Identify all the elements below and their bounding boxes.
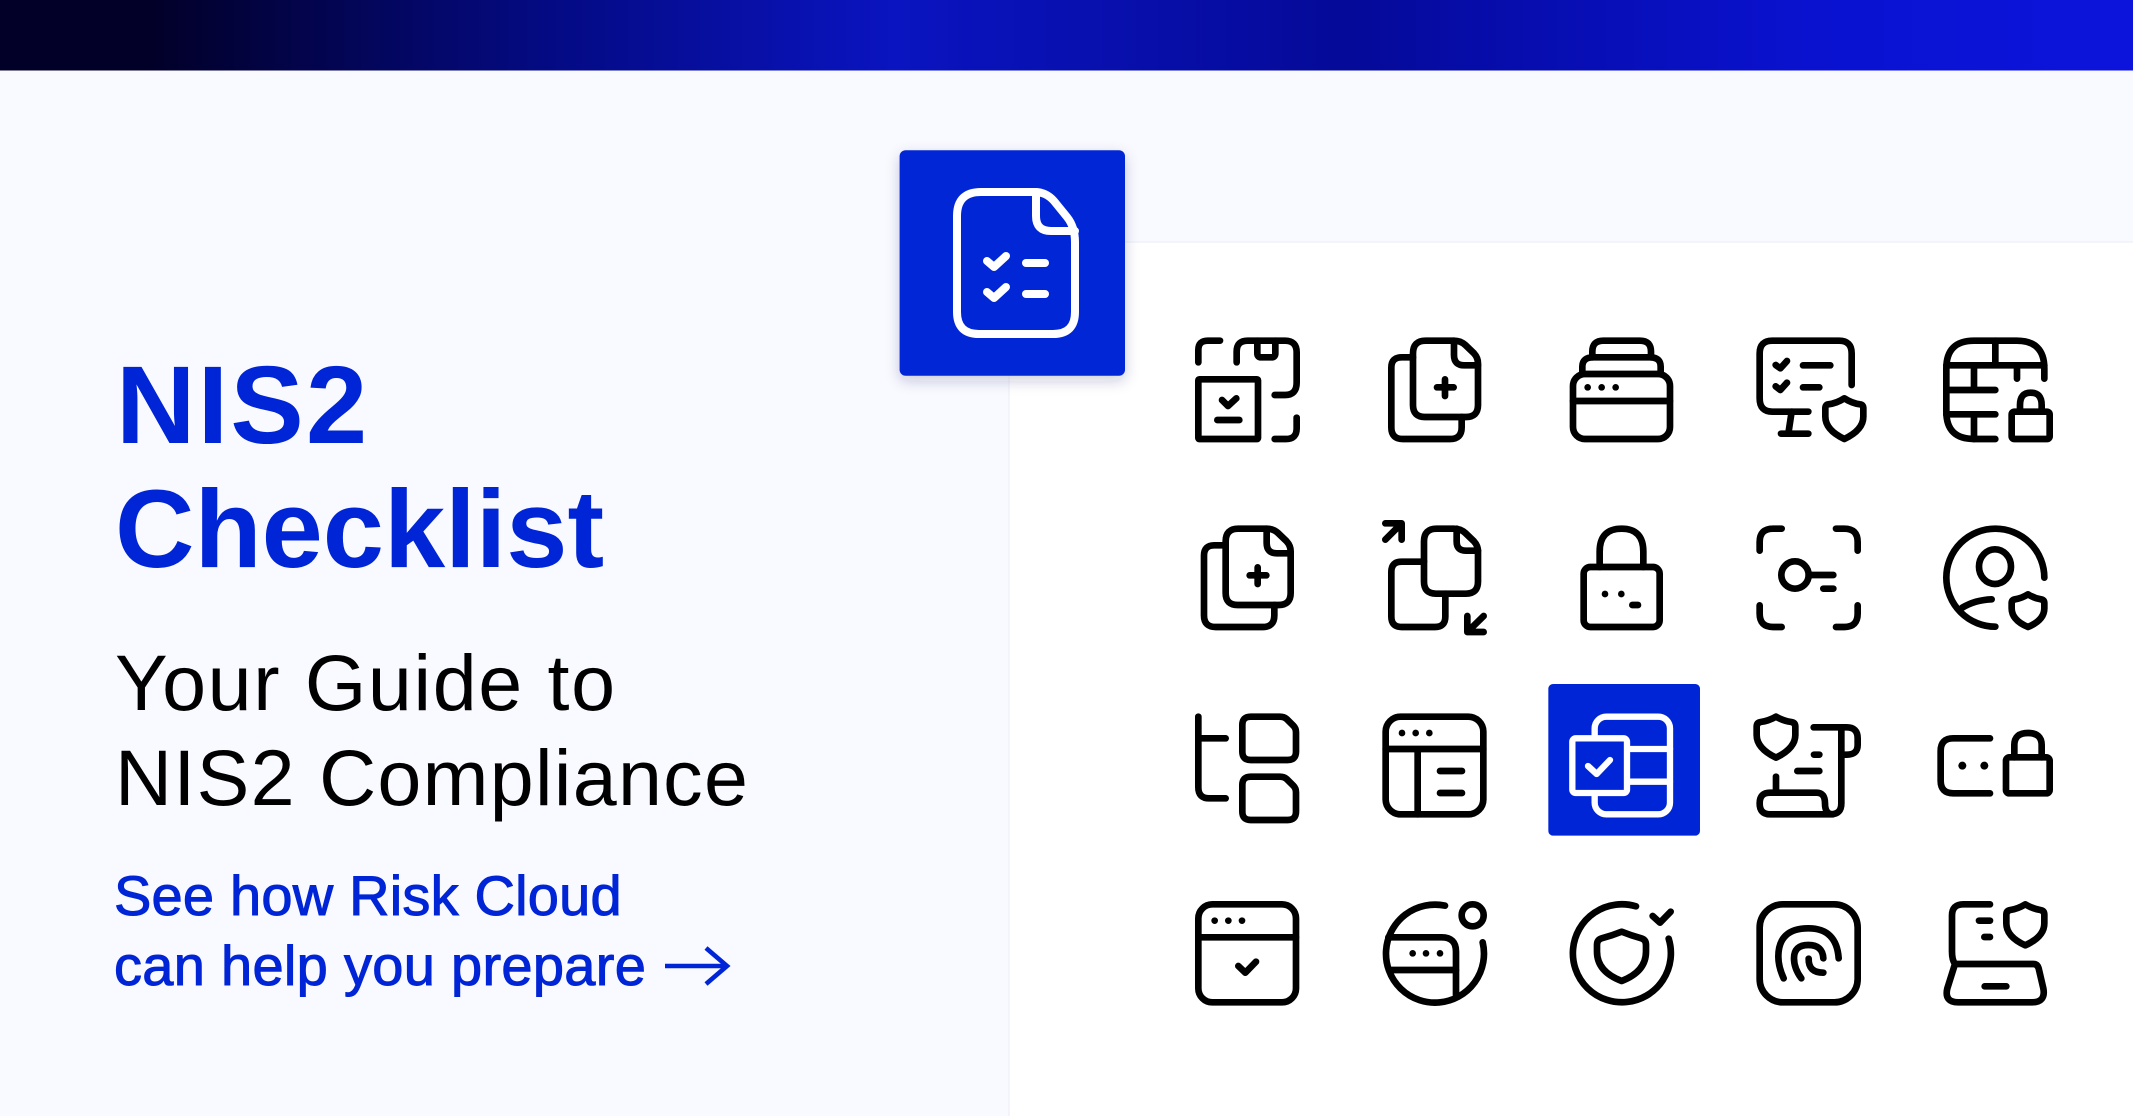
- top gradient bar: [0, 0, 2133, 70]
- icons, rows 1 and 2, columns 1 to 3: [1198, 341, 1670, 632]
- icons, rows 3 and 4, columns 1 to 3: [1198, 684, 1700, 1003]
- call to action text: can help you prepare: [114, 934, 646, 997]
- arrow: [665, 948, 727, 984]
- icons, rows 1 and 2, columns 4 and 5: [1760, 341, 2050, 627]
- icon: package scan: [1198, 341, 1297, 439]
- icons, rows 3 and 4, columns 4 and 5: [1757, 717, 2050, 1002]
- icon: add document 2: [1204, 529, 1291, 627]
- icon: password lock: [1941, 733, 2050, 793]
- icon: policy scroll with shield: [1757, 717, 1858, 814]
- panel: blue document card: [900, 150, 1125, 376]
- subtitle: [115, 638, 749, 822]
- icon: fingerprint: [1760, 904, 1858, 1002]
- icon: firewall lock: [1946, 341, 2050, 439]
- icon: folder tree: [1198, 717, 1296, 820]
- panel: white icon panel: [1009, 242, 2133, 1116]
- icon: checklist document: [957, 192, 1075, 334]
- icon: laptop with shield: [1947, 904, 2044, 1002]
- call to action text: [114, 864, 646, 997]
- icon: add document: [1391, 341, 1478, 439]
- icon: shield in circle: [1573, 904, 1671, 1002]
- icon: document transfer: [1385, 523, 1484, 632]
- icon: monitor with shield: [1760, 341, 1863, 439]
- icon: archive stack: [1573, 341, 1670, 439]
- icon: browser check: [1198, 904, 1296, 1002]
- title: [115, 344, 604, 591]
- icon: circular window: [1386, 904, 1484, 1003]
- title: Checklist: [115, 468, 604, 591]
- highlighted icon: table check: [1548, 684, 1700, 836]
- title: NIS2: [116, 344, 369, 467]
- subtitle: Your Guide to: [115, 638, 617, 727]
- icon: key scan: [1760, 529, 1858, 627]
- icon: padlock: [1584, 529, 1660, 627]
- call to action text: See how Risk Cloud: [114, 864, 622, 927]
- icon: browser layout: [1386, 717, 1483, 814]
- subtitle: NIS2 Compliance: [115, 733, 749, 822]
- icon: user with shield: [1946, 529, 2044, 627]
